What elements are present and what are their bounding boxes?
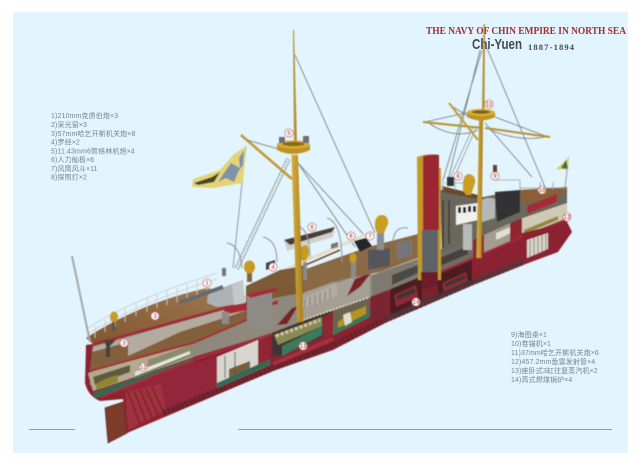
- numbered markers: 13: [564, 215, 571, 221]
- numbered markers: 1: [205, 281, 209, 287]
- numbered markers: 11: [486, 102, 493, 108]
- main mast and platform: [241, 30, 310, 322]
- stern ventilator: [110, 312, 118, 331]
- engine compartment 13: [272, 310, 332, 356]
- upper deck wood, stern: [86, 288, 245, 344]
- flag: [192, 146, 246, 268]
- forward upper compartments: [372, 258, 420, 296]
- stern rail: [88, 273, 217, 338]
- numbered markers: 9: [493, 174, 497, 180]
- lifeboat: [284, 227, 335, 251]
- numbered markers: 5: [287, 131, 291, 137]
- forward wood deck: [303, 234, 418, 293]
- rigging behind the masts: [295, 48, 548, 247]
- interior decks base: [90, 203, 567, 389]
- legend: items 1 to 8: 4)罗经×2: [51, 138, 80, 146]
- numbered markers: 6: [310, 225, 314, 231]
- legend: items 1 to 8: 7)风筒风斗×11: [51, 164, 98, 173]
- legend: items 9 to 14: [511, 330, 599, 384]
- gun platform red and stanchion: [222, 300, 278, 314]
- legend: items 1 to 8: 8)探照灯×2: [51, 172, 87, 182]
- forward red bulkheads: [473, 216, 522, 260]
- legend: items 1 to 8: 5)11.43mm6管格林机炮×4: [51, 146, 135, 156]
- legend: items 1 to 8: 1)210mm克虏伯炮×3: [51, 111, 118, 120]
- jack at the bow: [556, 157, 569, 188]
- legend: items 9 to 14: 13)座卧式3缸往复蒸汽机×2: [511, 366, 598, 375]
- bridge and fore structure: [440, 174, 567, 252]
- ventilators: [244, 243, 356, 282]
- numbered markers: 12: [140, 365, 147, 371]
- numbered markers: 4: [271, 265, 275, 271]
- davits: [227, 218, 408, 268]
- numbered markers: 13: [300, 344, 307, 350]
- legend: items 9 to 14: 9)海图桌×1: [511, 330, 547, 339]
- ship name and years: [472, 36, 575, 53]
- numbered markers: 3: [122, 341, 126, 347]
- stern lower compartment: [88, 343, 193, 391]
- bow staff: [72, 256, 90, 342]
- legend: items 1 to 8: 3)57mm哈乞开斯机关炮×8: [51, 129, 135, 138]
- legend: items 1 to 8: [51, 111, 135, 182]
- numbered markers: [120, 100, 571, 371]
- rudder: [105, 402, 127, 443]
- numbered markers: 8: [456, 174, 460, 180]
- bottom rule lines: [29, 428, 612, 430]
- ship name and years: Chi-Yuen: [472, 36, 522, 53]
- fore mast, platform and yards: [423, 24, 550, 258]
- engine room: [217, 335, 270, 388]
- legend: items 9 to 14: 10)卷锚机×1: [511, 339, 551, 348]
- midship upper compartment: [303, 272, 370, 320]
- main gun: [179, 280, 245, 307]
- numbered markers: 14: [413, 300, 420, 306]
- legend: items 9 to 14: 12)457.2mm鱼雷发射管×4: [511, 357, 595, 366]
- ribbed stern plating: [125, 357, 217, 432]
- ship cutaway illustration: [72, 24, 572, 443]
- lower hull plating band: [163, 262, 523, 413]
- legend: items 1 to 8: 2)采光窗×3: [51, 120, 87, 129]
- hull side below forward rooms: [473, 244, 523, 285]
- hull silhouette: [85, 203, 572, 433]
- funnel: [417, 154, 441, 290]
- ship name and years: 1887-1894: [528, 42, 575, 52]
- legend: items 9 to 14: 11)37mm哈乞开斯机关炮×6: [511, 348, 599, 357]
- boiler rooms: [390, 273, 422, 315]
- legend: items 1 to 8: 6)人力舢板×6: [51, 155, 94, 164]
- second deck wood, stern: [90, 304, 270, 371]
- engine compartment 2: [333, 297, 370, 335]
- legend: items 9 to 14: 14)高式燃煤锅炉×4: [511, 375, 572, 384]
- numbered markers: 3: [153, 314, 157, 320]
- ventilator and block at funnel: [368, 215, 390, 270]
- numbered markers: 6: [349, 234, 353, 240]
- machinery on the deck: [222, 238, 412, 276]
- stern gun: [104, 340, 116, 357]
- ladders on masts: [235, 127, 476, 270]
- numbered markers: 7: [368, 234, 372, 240]
- red deck edges: [90, 219, 567, 398]
- numbered markers: 10: [539, 188, 546, 194]
- bow hull plate: [522, 222, 572, 265]
